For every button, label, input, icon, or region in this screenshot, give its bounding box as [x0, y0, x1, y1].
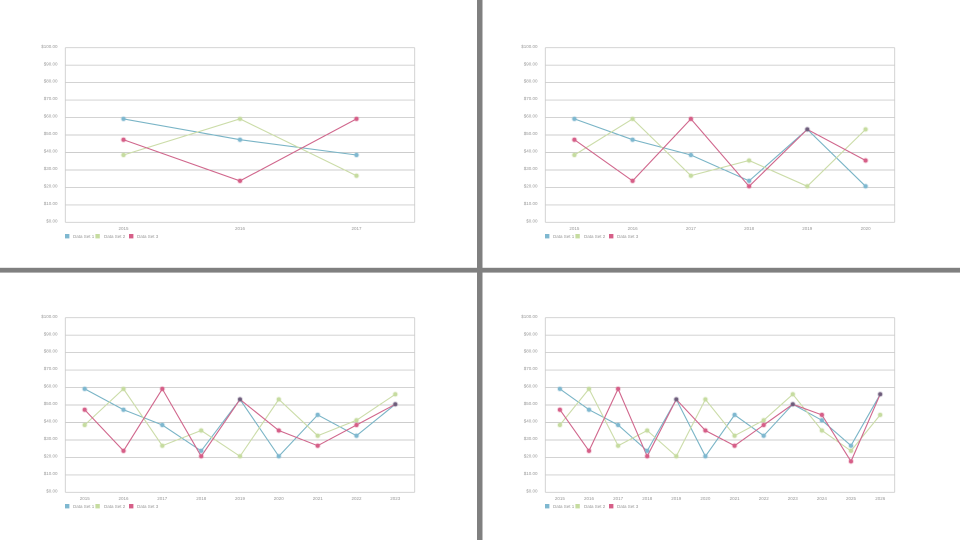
x axis labels: 2020 [274, 496, 284, 501]
y axis labels: $30.00 [44, 166, 58, 171]
y axis labels: $30.00 [524, 166, 538, 171]
x axis labels: 2023 [788, 496, 798, 501]
y axis labels: $60.00 [524, 114, 538, 119]
marker: overlap at 2019 [805, 127, 809, 131]
line: Data Set 3 [85, 389, 395, 456]
y axis labels: $10.00 [44, 201, 58, 206]
x axis labels: 2020 [700, 496, 711, 501]
y axis labels: $20.00 [524, 184, 538, 188]
line: Data Set 1 [574, 119, 866, 186]
y axis labels: $0.00 [526, 488, 538, 493]
y axis labels: $80.00 [44, 349, 58, 354]
x axis labels: 2017 [686, 226, 696, 231]
legend: Data Set 1 [73, 234, 95, 239]
y axis labels: $60.00 [44, 384, 58, 389]
x axis labels: 2015 [569, 226, 580, 231]
y axis labels: $10.00 [524, 471, 538, 476]
y axis labels: $90.00 [524, 61, 538, 66]
y axis labels: $60.00 [44, 114, 58, 119]
markers: Data Set 2 [558, 387, 882, 458]
x axis labels: 2015 [555, 496, 565, 501]
x axis labels: 2016 [628, 226, 638, 231]
x axis labels: 2016 [584, 496, 595, 501]
y axis labels: $40.00 [524, 149, 538, 154]
y axis labels: $90.00 [44, 61, 58, 66]
x axis labels: 2022 [351, 496, 362, 501]
line: Data Set 2 [574, 119, 866, 186]
x axis labels: 2019 [671, 496, 682, 501]
legend: Data Set 1 [553, 234, 575, 239]
y axis labels: $100.00 [41, 44, 58, 49]
x axis labels: 2021 [730, 496, 740, 501]
line: Data Set 2 [560, 389, 880, 456]
panel: chart 2015-2023 [41, 314, 415, 509]
y axis labels [521, 314, 538, 493]
markers: Data Set 3 [558, 387, 853, 463]
line: Data Set 1 [560, 389, 880, 456]
legend [65, 504, 159, 509]
y axis labels [521, 44, 538, 223]
y axis labels: $50.00 [524, 131, 538, 136]
y axis labels: $60.00 [524, 384, 538, 389]
y axis labels: $10.00 [524, 201, 538, 206]
y axis labels: $100.00 [521, 44, 538, 49]
legend [65, 234, 159, 239]
markers: Data Set 1 [83, 387, 358, 458]
x axis labels: 2019 [235, 496, 246, 501]
markers: Data Set 1 [572, 117, 868, 188]
markers: Data Set 1 [558, 387, 853, 458]
legend: Data Set 3 [617, 234, 639, 239]
markers: Data Set 3 [83, 387, 358, 458]
line: Data Set 2 [124, 119, 356, 176]
y axis labels: $80.00 [44, 79, 58, 84]
y axis labels: $30.00 [524, 436, 538, 441]
x axis labels: 2016 [118, 496, 129, 501]
legend: Data Set 3 [617, 504, 639, 509]
y axis labels [41, 314, 58, 493]
y axis labels: $20.00 [524, 454, 538, 458]
y axis labels: $80.00 [524, 79, 538, 84]
y axis labels: $0.00 [526, 218, 538, 223]
legend [545, 234, 639, 239]
markers: Data Set 3 [572, 117, 868, 188]
markers: Data Set 2 [572, 117, 868, 188]
markers: overlaps at 2019, 2023 and 2026 [674, 392, 882, 406]
legend: Data Set 2 [584, 504, 606, 509]
x axis labels [569, 226, 871, 231]
y axis labels: $50.00 [524, 401, 538, 406]
y axis labels: $70.00 [524, 96, 538, 101]
y axis labels: $20.00 [44, 454, 58, 458]
x axis labels: 2017 [351, 226, 362, 231]
x axis labels [118, 226, 362, 231]
y axis labels: $100.00 [521, 314, 538, 319]
legend: Data Set 1 [553, 504, 575, 509]
x axis labels: 2015 [80, 496, 90, 501]
markers: Data Set 1 [122, 117, 358, 157]
y axis labels: $0.00 [46, 488, 58, 493]
x axis labels: 2015 [118, 226, 129, 231]
legend [545, 504, 639, 509]
legend: Data Set 1 [73, 504, 95, 509]
x axis labels [80, 496, 401, 501]
legend: Data Set 3 [137, 504, 159, 509]
y axis labels: $70.00 [44, 366, 58, 371]
y axis labels: $100.00 [41, 314, 58, 319]
x axis labels: 2022 [759, 496, 769, 501]
x axis labels: 2019 [802, 226, 813, 231]
y axis labels: $0.00 [46, 218, 58, 223]
x axis labels: 2025 [846, 496, 857, 501]
y axis labels: $70.00 [44, 96, 58, 101]
line: Data Set 3 [124, 119, 356, 181]
x axis labels: 2016 [235, 226, 246, 231]
y axis labels: $90.00 [524, 331, 538, 336]
markers: Data Set 2 [122, 117, 358, 178]
horizontal divider [0, 268, 960, 273]
y axis labels: $10.00 [44, 471, 58, 476]
x axis labels [555, 496, 886, 501]
x axis labels: 2020 [861, 226, 871, 231]
y axis labels: $50.00 [44, 401, 58, 406]
legend: Data Set 2 [104, 234, 126, 239]
x axis labels: 2018 [642, 496, 653, 501]
y axis labels [41, 44, 58, 223]
x axis labels: 2023 [390, 496, 401, 501]
line: Data Set 1 [124, 119, 356, 155]
vertical divider [477, 0, 482, 540]
x axis labels: 2026 [875, 496, 886, 501]
line: Data Set 3 [574, 119, 866, 186]
x axis labels: 2018 [744, 226, 755, 231]
line: Data Set 3 [560, 389, 880, 461]
y axis labels: $70.00 [524, 366, 538, 371]
y axis labels: $20.00 [44, 184, 58, 188]
x axis labels: 2017 [613, 496, 624, 501]
legend: Data Set 2 [104, 504, 126, 509]
legend: Data Set 3 [137, 234, 159, 239]
y axis labels: $40.00 [524, 419, 538, 424]
legend: Data Set 2 [584, 234, 606, 239]
x axis labels: 2021 [313, 496, 323, 501]
y axis labels: $80.00 [524, 349, 538, 354]
markers: overlaps at 2019 and 2023 [238, 397, 397, 406]
y axis labels: $90.00 [44, 331, 58, 336]
x axis labels: 2017 [157, 496, 168, 501]
panel: chart 2015-2026 [521, 314, 895, 509]
markers: Data Set 2 [83, 387, 397, 458]
y axis labels: $40.00 [44, 149, 58, 154]
panel: chart 2015-2017 [41, 44, 415, 239]
line: Data Set 2 [85, 389, 395, 456]
x axis labels: 2018 [196, 496, 207, 501]
x axis labels: 2024 [817, 496, 827, 501]
panel: chart 2015-2020 [521, 44, 895, 239]
y axis labels: $40.00 [44, 419, 58, 424]
y axis labels: $50.00 [44, 131, 58, 136]
markers: Data Set 3 [122, 117, 358, 183]
line: Data Set 1 [85, 389, 395, 456]
y axis labels: $30.00 [44, 436, 58, 441]
